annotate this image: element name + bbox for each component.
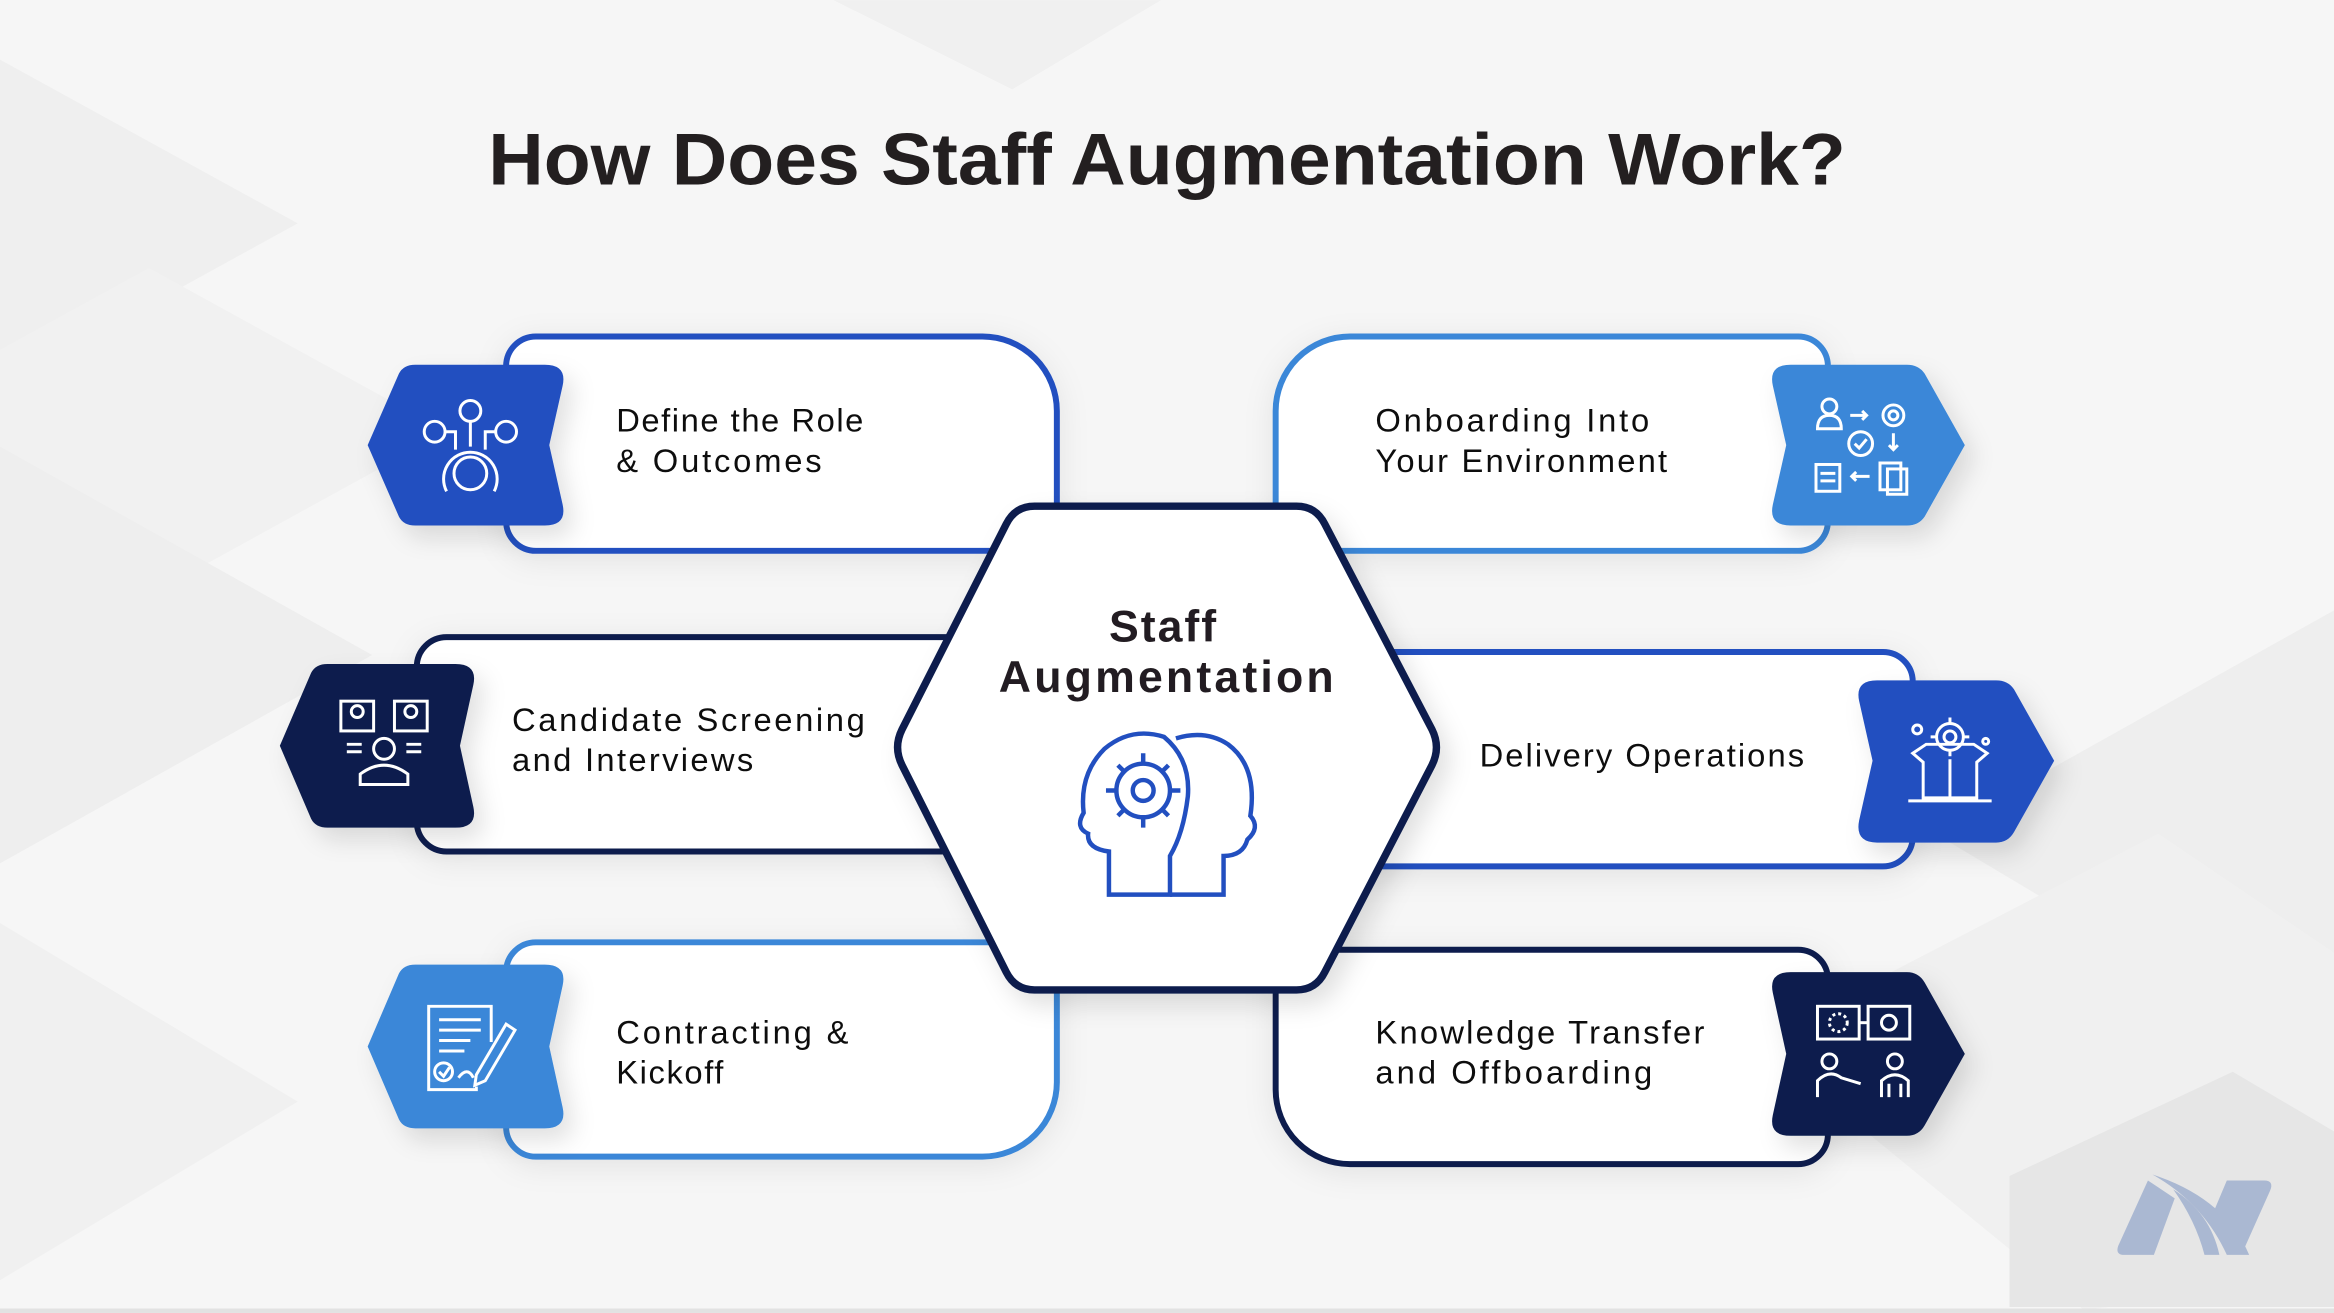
text: delivery: Delivery Operations xyxy=(1480,737,1804,774)
text: knowledge transfer: Knowledge Transfer xyxy=(1375,1014,1704,1051)
card: delivery xyxy=(1325,652,1913,866)
card: onboarding xyxy=(1276,336,1828,551)
card: contracting xyxy=(506,942,1057,1157)
text: contracting: Contracting & xyxy=(616,1014,849,1051)
text: center title: Staff xyxy=(1109,603,1216,652)
text: define the role: Define the Role xyxy=(616,402,863,439)
badge: delivery icon xyxy=(1858,680,2054,843)
card: onboarding: Your Environment xyxy=(1375,442,1667,479)
icon: head with gear xyxy=(1080,734,1255,895)
card: candidate screening: and Interviews xyxy=(512,741,753,778)
card: knowledge transfer xyxy=(1276,950,1828,1164)
center hexagon: Augmentation xyxy=(999,653,1334,702)
text: candidate screening: Candidate Screening xyxy=(512,701,865,738)
center hexagon xyxy=(898,506,1436,990)
title: How Does Staff Augmentation Work? xyxy=(488,120,1846,201)
card: define the role: & Outcomes xyxy=(616,442,822,479)
card: candidate screening xyxy=(417,637,1012,851)
badge: candidate icon xyxy=(280,664,474,828)
card: define the role xyxy=(506,336,1057,551)
badge: onboarding icon xyxy=(1772,365,1965,526)
text: onboarding: Onboarding Into xyxy=(1375,402,1649,439)
badge: knowledge icon xyxy=(1772,972,1965,1136)
badge: define role icon xyxy=(368,365,563,526)
badge: contracting icon xyxy=(368,965,563,1128)
logo xyxy=(2117,1175,2271,1255)
card: knowledge transfer: and Offboarding xyxy=(1375,1054,1652,1091)
card: contracting: Kickoff xyxy=(616,1054,724,1091)
